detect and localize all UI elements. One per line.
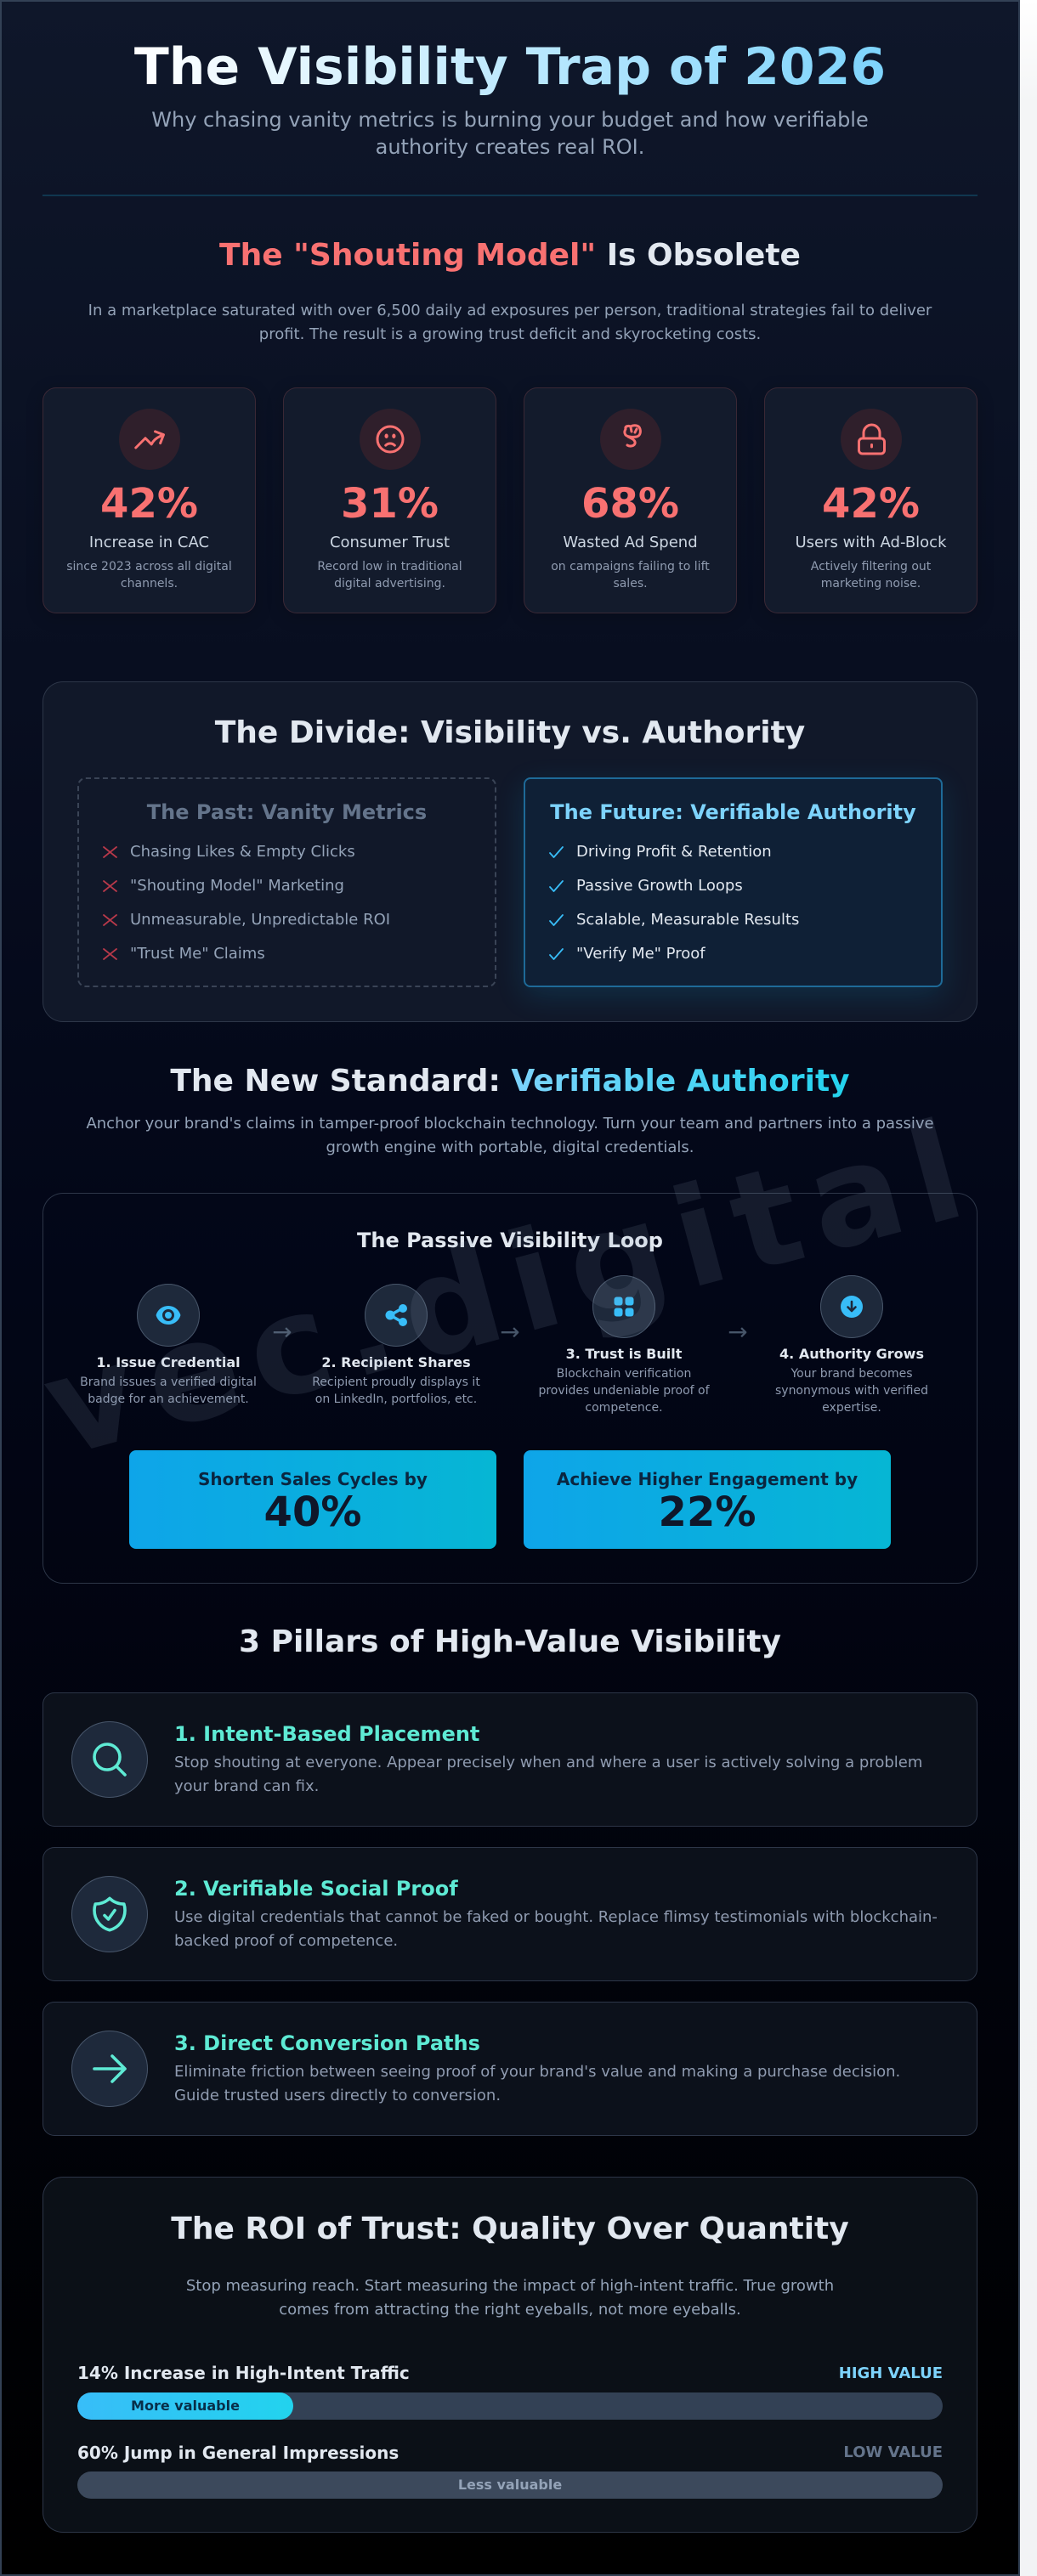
callout: engagement — [524, 1450, 891, 1549]
heading: shouting model: The "Shouting Model" Is Obsolete — [219, 238, 801, 273]
icon: search — [71, 1721, 148, 1798]
stat card: wasted spend — [524, 387, 737, 613]
stat note: on campaigns failing to lift — [551, 560, 710, 573]
roi paragraph: comes from attracting the right eyeballs, not more eyeballs. — [279, 2301, 741, 2319]
step 4 — [775, 1275, 928, 1415]
panel: the past — [77, 777, 496, 987]
step 2 — [312, 1284, 480, 1406]
callout label: Shorten Sales Cycles by — [198, 1469, 428, 1489]
callout: sales cycles — [129, 1450, 496, 1549]
stat note — [551, 560, 710, 590]
subtitle: authority creates real ROI. — [376, 135, 644, 159]
pillar title: 2. Verifiable Social Proof — [174, 1877, 458, 1901]
step title: 2. Recipient Shares — [321, 1354, 471, 1370]
step description — [538, 1367, 710, 1415]
pillar description: Use digital credentials that cannot be faked or bought. Replace flimsy testimonials with blockchain- — [174, 1908, 938, 1926]
pillar description — [174, 1908, 938, 1950]
future list item: Passive Growth Loops — [576, 877, 743, 895]
arrow: → — [728, 1318, 748, 1346]
panel: the divide — [42, 681, 978, 1022]
bar: general impressions — [77, 2471, 943, 2499]
past list item: Unmeasurable, Unpredictable ROI — [130, 911, 390, 929]
stat value: 31% — [341, 479, 439, 527]
stat note: channels. — [121, 577, 178, 590]
stat value: 42% — [100, 479, 198, 527]
future list item: "Verify Me" Proof — [576, 945, 706, 963]
step description: Your brand becomes — [790, 1367, 913, 1381]
icon: arrow right — [71, 2031, 148, 2107]
future list item: Scalable, Measurable Results — [576, 911, 799, 929]
stat note — [317, 560, 462, 590]
step description: provides undeniable proof of — [538, 1384, 710, 1398]
subtitle: Why chasing vanity metrics is burning your budget and how verifiable — [151, 108, 869, 132]
title: The Visibility Trap of 2026 — [134, 37, 886, 97]
stat value: 42% — [822, 479, 920, 527]
bar: high-intent traffic — [77, 2392, 943, 2420]
step title: 1. Issue Credential — [96, 1354, 241, 1370]
subtitle — [151, 108, 869, 159]
step description: expertise. — [822, 1401, 881, 1415]
stat card: trust — [283, 387, 496, 613]
panel: the future — [524, 777, 943, 987]
pillar description: Guide trusted users directly to conversion. — [174, 2087, 501, 2104]
icon: shield check — [71, 1876, 148, 1952]
heading: roi: The ROI of Trust: Quality Over Quantity — [171, 2212, 849, 2246]
intro paragraph: profit. The result is a growing trust deficit and skyrocketing costs. — [259, 325, 761, 343]
stat label: Users with Ad-Block — [796, 534, 947, 551]
icon: share — [365, 1284, 428, 1347]
panel: stat cards — [42, 387, 978, 613]
pillar description — [174, 1754, 922, 1795]
icon: wasted spend — [600, 409, 661, 470]
stat note: marketing noise. — [821, 577, 921, 590]
pillar description: Stop shouting at everyone. Appear precisely when and where a user is actively solving a problem — [174, 1754, 922, 1771]
stat note — [811, 560, 931, 590]
stat note: digital advertising. — [334, 577, 445, 590]
new standard paragraph — [86, 1115, 934, 1156]
stat note — [66, 560, 232, 590]
stat note: Actively filtering out — [811, 560, 931, 573]
callout value: 40% — [264, 1489, 361, 1536]
heading: past: The Past: Vanity Metrics — [147, 800, 427, 824]
step description: synonymous with verified — [775, 1384, 928, 1398]
heading: new standard: Verifiable Authority — [511, 1064, 850, 1099]
step 3 — [538, 1275, 710, 1415]
bar tag: high value: HIGH VALUE — [839, 2364, 943, 2382]
roi paragraph: Stop measuring reach. Start measuring the impact of high-intent traffic. True growth — [186, 2277, 834, 2295]
stat label: Consumer Trust — [330, 534, 450, 551]
heading: new standard — [170, 1064, 850, 1099]
pillar 3 — [42, 2002, 978, 2136]
roi paragraph — [186, 2277, 834, 2319]
past list item: Chasing Likes & Empty Clicks — [130, 843, 355, 861]
header — [42, 37, 978, 196]
pillar description: Eliminate friction between seeing proof of your brand's value and making a purchase decision. — [174, 2063, 900, 2081]
stat card: CAC — [42, 387, 256, 613]
step description: Brand issues a verified digital — [80, 1376, 257, 1389]
pillar title: 1. Intent-Based Placement — [174, 1722, 479, 1746]
icon: lock — [840, 409, 901, 470]
step description: on LinkedIn, portfolios, etc. — [315, 1393, 477, 1406]
heading: loop: The Passive Visibility Loop — [357, 1229, 663, 1252]
pillar description — [174, 2063, 900, 2104]
step description: Recipient proudly displays it — [312, 1376, 480, 1389]
stat value: 68% — [581, 479, 679, 527]
heading: new standard: The New Standard: — [170, 1064, 501, 1099]
intro paragraph: In a marketplace saturated with over 6,500 daily ad exposures per person, traditional strategies fail to deliver — [88, 302, 932, 319]
panel: roi of trust — [42, 2177, 978, 2533]
new standard paragraph: Anchor your brand's claims in tamper-proof blockchain technology. Turn your team and partners into a passive — [86, 1115, 934, 1133]
past list item: "Trust Me" Claims — [130, 945, 265, 963]
watermark: vec.digital — [29, 1087, 991, 1488]
stat note: since 2023 across all digital — [66, 560, 232, 573]
icon: trending up — [119, 409, 180, 470]
callout label: Achieve Higher Engagement by — [557, 1469, 858, 1489]
heading: the divide: The Divide: Visibility vs. Authority — [215, 715, 805, 750]
intro paragraph — [88, 302, 932, 343]
stat label: Wasted Ad Spend — [563, 534, 698, 551]
pillar title: 3. Direct Conversion Paths — [174, 2031, 480, 2055]
pillar description: your brand can fix. — [174, 1777, 319, 1795]
step description — [775, 1367, 928, 1415]
callout value: 22% — [659, 1489, 756, 1536]
bar label: high-intent: 14% Increase in High-Intent Traffic — [77, 2363, 410, 2383]
stat card: ad-block — [764, 387, 978, 613]
step description — [312, 1376, 480, 1406]
future list item: Driving Profit & Retention — [576, 843, 772, 861]
step title: 4. Authority Grows — [779, 1346, 924, 1361]
step description: Blockchain verification — [557, 1367, 691, 1381]
bar label: impressions: 60% Jump in General Impressions — [77, 2443, 399, 2463]
new standard paragraph: growth engine with portable, digital credentials. — [326, 1138, 694, 1156]
bar: general impressions: Less valuable — [458, 2477, 562, 2493]
step 1 — [80, 1284, 257, 1406]
bar tag: low value: LOW VALUE — [843, 2443, 943, 2461]
pillar description: backed proof of competence. — [174, 1932, 398, 1950]
past list item: "Shouting Model" Marketing — [130, 877, 344, 895]
step description: competence. — [585, 1401, 663, 1415]
heading: future: The Future: Verifiable Authority — [550, 800, 916, 824]
step description — [80, 1376, 257, 1406]
icon: frown — [359, 409, 420, 470]
pillar 2 — [42, 1847, 978, 1981]
icon: eye — [137, 1284, 200, 1347]
pillar 1 — [42, 1692, 978, 1827]
bar fill: more valuable: More valuable — [131, 2398, 240, 2414]
stat note: Record low in traditional — [317, 560, 462, 573]
stat label: Increase in CAC — [89, 534, 209, 551]
arrow: → — [500, 1318, 520, 1346]
bar fill: more valuable — [77, 2392, 293, 2420]
icon: grid — [592, 1275, 655, 1338]
arrow: → — [272, 1318, 292, 1346]
panel: passive visibility loop — [42, 1193, 978, 1584]
stat note: sales. — [613, 577, 648, 590]
heading: pillars: 3 Pillars of High-Value Visibility — [239, 1624, 781, 1659]
step title: 3. Trust is Built — [566, 1346, 682, 1361]
icon: arrow circle — [820, 1275, 883, 1338]
step description: badge for an achievement. — [88, 1393, 249, 1406]
